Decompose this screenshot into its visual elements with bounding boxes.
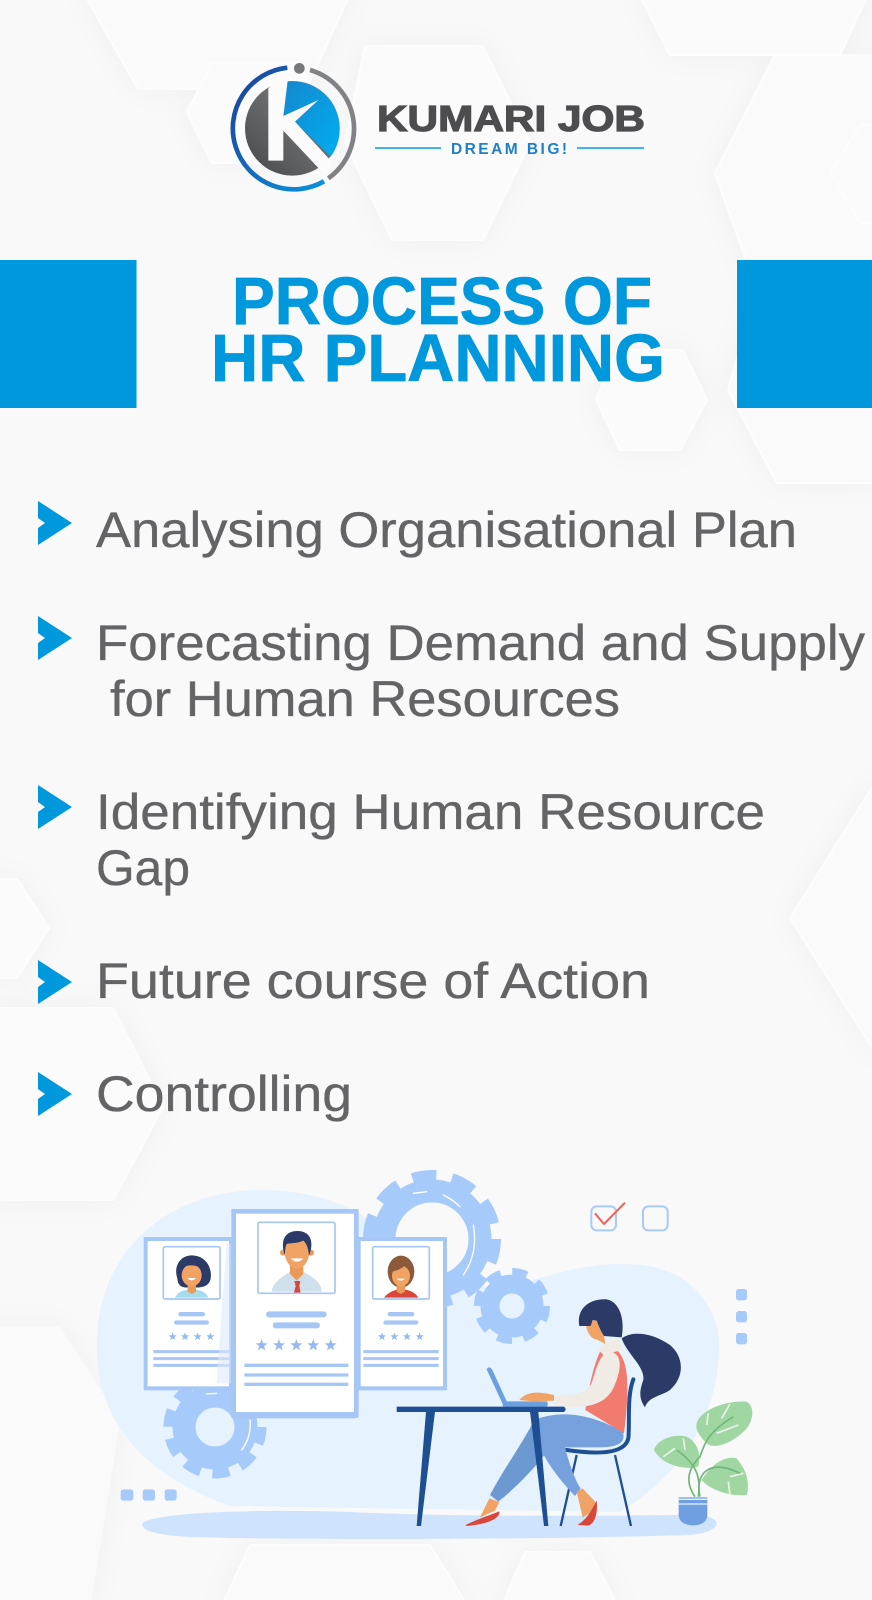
step 3: Gap — [96, 840, 190, 896]
step 4: Future course of Action — [96, 953, 650, 1009]
logo — [233, 63, 645, 189]
step 1: Analysing Organisational Plan — [96, 502, 797, 558]
left card — [146, 1239, 231, 1388]
title — [211, 264, 665, 396]
potted plant — [654, 1401, 752, 1525]
illustration: recruiter at desk with candidate profiles — [97, 1176, 752, 1539]
ground shadow — [142, 1511, 717, 1539]
step 3 — [38, 784, 765, 896]
left blue block — [0, 260, 136, 408]
logo wordmark: KUMARI JOB — [377, 98, 645, 139]
woman figure — [519, 1299, 681, 1526]
woman at desk with plant and checkboxes — [397, 1203, 752, 1526]
far leg — [466, 1425, 547, 1526]
step 2: for Human Resources — [110, 671, 620, 727]
chair — [561, 1379, 633, 1526]
logo mark — [233, 63, 354, 189]
process list — [38, 501, 865, 1122]
icon: small gear — [478, 1272, 546, 1340]
step 5: Controlling — [96, 1066, 352, 1122]
step 2: Forecasting Demand and Supply — [96, 615, 865, 671]
background blob — [97, 1190, 719, 1512]
icon: large gear — [369, 1176, 495, 1302]
title band — [0, 260, 872, 408]
logo tagline: DREAM BIG! — [451, 141, 567, 158]
step 2 — [38, 615, 865, 727]
laptop — [487, 1367, 548, 1407]
decorative dots right — [736, 1289, 747, 1344]
decorative dots left — [121, 1489, 177, 1501]
icon: lower gear — [169, 1381, 261, 1473]
right blue block — [737, 260, 872, 408]
title: HR PLANNING — [211, 321, 665, 396]
title: PROCESS OF — [232, 264, 652, 339]
desk — [397, 1407, 566, 1526]
right card — [359, 1239, 445, 1388]
step 3: Identifying Human Resource — [96, 784, 765, 840]
center card — [234, 1211, 356, 1418]
checkboxes — [591, 1203, 668, 1230]
candidate cards — [121, 1192, 475, 1501]
